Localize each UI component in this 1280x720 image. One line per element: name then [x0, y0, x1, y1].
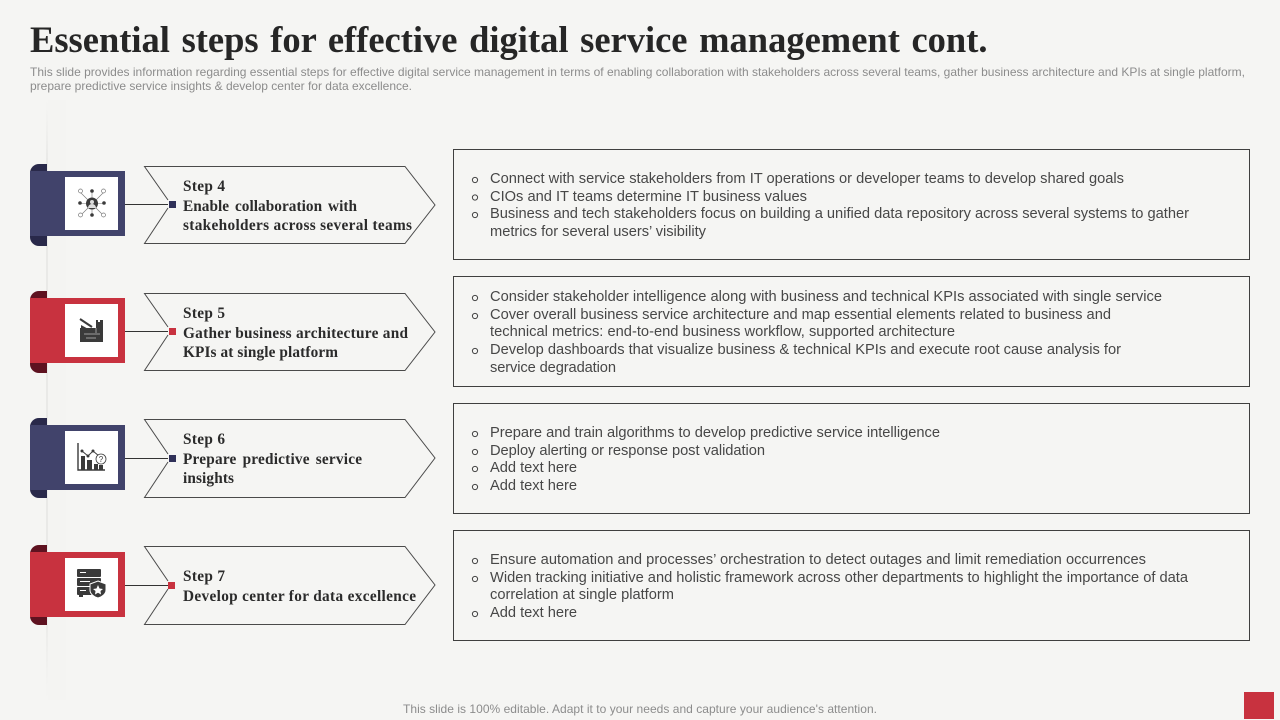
step 6 details: Add text here: [490, 478, 577, 494]
step 6 label: [183, 431, 362, 487]
step 4 marker: [169, 201, 176, 208]
step 5 details: Consider stakeholder intelligence along with business and technical KPIs associated with single service: [490, 289, 1162, 305]
step 4 connector: [125, 204, 169, 206]
step 7 arrow: [144, 546, 435, 624]
step 6 row: [30, 404, 1250, 514]
step 5 details: Develop dashboards that visualize business & technical KPIs and execute root cause analysis for: [490, 342, 1121, 358]
step 7 details: Ensure automation and processes’ orchestration to detect outages and limit remediation occurrences: [490, 552, 1146, 568]
step 6 label: Prepare predictive service: [183, 451, 362, 468]
step 7 details: [454, 530, 1250, 640]
icon: stakeholder network: [78, 189, 106, 217]
footer note: This slide is 100% editable. Adapt it to your needs and capture your audience's attention.: [403, 702, 877, 716]
step 6 details: Add text here: [490, 460, 577, 476]
step 7 details: Add text here: [490, 605, 577, 621]
step 4 label: stakeholders across several teams: [183, 217, 412, 234]
step 6 ribbon: [30, 418, 125, 498]
step 6 details: Prepare and train algorithms to develop predictive service intelligence: [490, 425, 940, 441]
step 6 label: insights: [183, 470, 234, 487]
icon: server with shield: [77, 569, 106, 598]
step 4 details: [454, 150, 1250, 260]
step 6 arrow: [144, 420, 435, 498]
step 7 label: [183, 568, 416, 605]
subtitle: [30, 65, 1245, 93]
step 7 row: [30, 530, 1250, 640]
step 4 label: Step 4: [183, 178, 225, 195]
step 4 details: CIOs and IT teams determine IT business values: [490, 189, 807, 205]
step 4 arrow: [144, 166, 435, 244]
step 5 label: Gather business architecture and: [183, 325, 408, 342]
step 7 marker: [168, 582, 175, 589]
step 5 details: [454, 276, 1250, 386]
icon: chart with question mark: [78, 443, 106, 470]
step 7 label: Develop center for data excellence: [183, 588, 416, 605]
step 5 ribbon: [30, 291, 125, 373]
step 7 details: Widen tracking initiative and holistic framework across other departments to highlight the importance of data: [490, 570, 1189, 586]
icon: chart with question mark: ?: [99, 455, 104, 464]
step 5 label: Step 5: [183, 305, 225, 322]
icon: brick wall and trowel: [80, 319, 103, 342]
step 5 label: [183, 305, 408, 361]
step 4 label: [183, 178, 412, 234]
step 7 label: Step 7: [183, 568, 225, 585]
step 4 label: Enable collaboration with: [183, 198, 357, 215]
title: Essential steps for effective digital service management cont.: [30, 19, 988, 60]
step 7 details: correlation at single platform: [490, 587, 674, 603]
step 4 details: Business and tech stakeholders focus on building a unified data repository across several systems to gather: [490, 206, 1189, 222]
step 7 ribbon: [30, 545, 125, 625]
step 6 details: Deploy alerting or response post validation: [490, 443, 765, 459]
step 4 details: metrics for several users’ visibility: [490, 224, 707, 240]
step 5 label: KPIs at single platform: [183, 344, 338, 361]
step 5 arrow: [144, 294, 435, 370]
step 6 details: [454, 404, 1250, 514]
step 5 connector: [125, 330, 169, 332]
step 4 row: [30, 150, 1250, 260]
step 5 row: [30, 276, 1250, 386]
step 7 connector: [125, 584, 168, 586]
step 5 marker: [169, 328, 176, 335]
step 5 details: technical metrics: end-to-end business workflow, supported architecture: [490, 324, 955, 340]
subtitle: This slide provides information regarding essential steps for effective digital service management in terms of enabling collaboration with stakeholders across several teams, gather business architecture and KPIs at single platform,: [30, 65, 1245, 79]
step 5 details: service degradation: [490, 360, 616, 376]
subtitle: prepare predictive service insights & develop center for data excellence.: [30, 79, 412, 93]
step 4 details: Connect with service stakeholders from IT operations or developer teams to develop shared goals: [490, 171, 1124, 187]
step 4 ribbon: [30, 164, 125, 246]
corner accent square: [1244, 692, 1274, 719]
step 5 details: Cover overall business service architecture and map essential elements related to business and: [490, 307, 1111, 323]
step 6 connector: [125, 458, 169, 460]
step 6 marker: [169, 455, 176, 462]
step 6 label: Step 6: [183, 431, 225, 448]
